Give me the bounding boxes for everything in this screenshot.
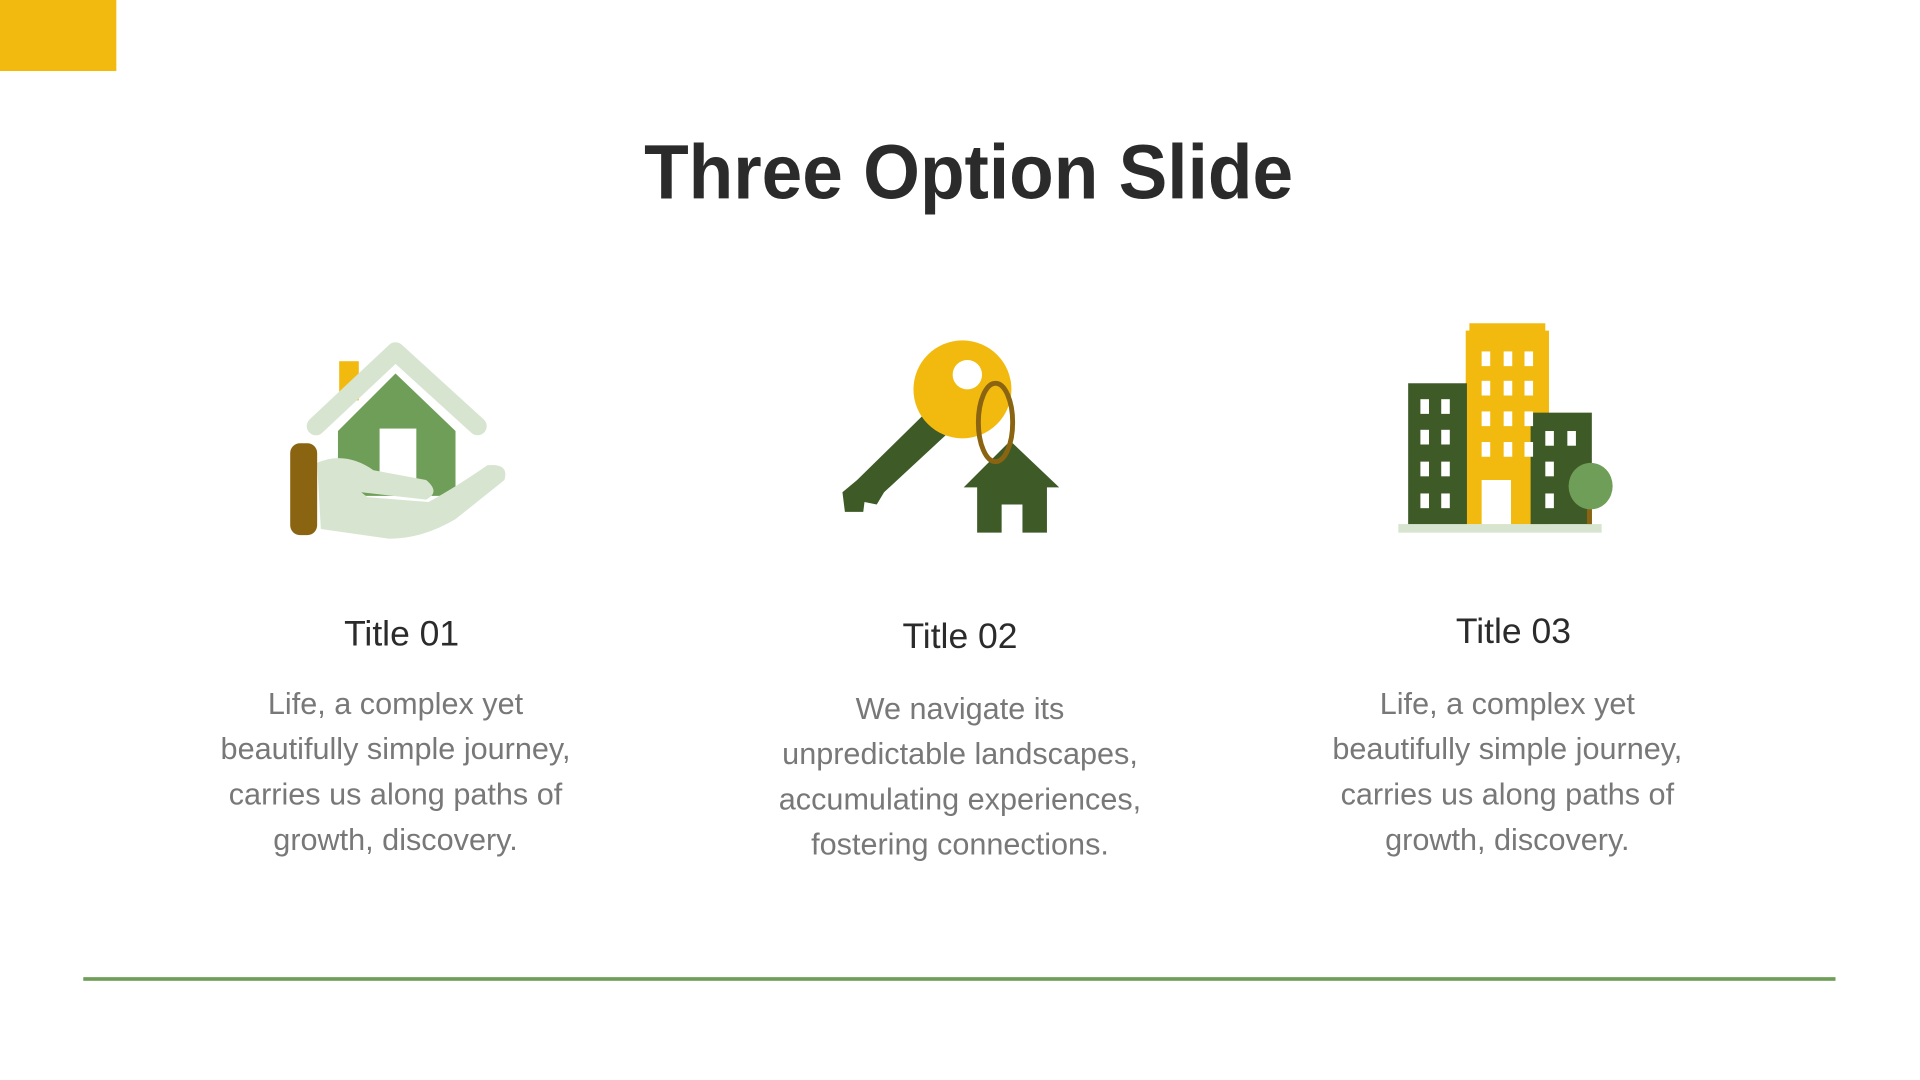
option 2 text: accumulating experiences, (779, 782, 1141, 816)
option 3 text (1332, 611, 1682, 857)
option 3 text: carries us along paths of (1341, 777, 1675, 811)
option 1 text: beautifully simple journey, (221, 732, 570, 766)
option 2 text: We navigate its (856, 692, 1064, 726)
icon: city buildings (1398, 323, 1613, 533)
option 1 text: Life, a complex yet (268, 687, 524, 721)
icon: house in hand (290, 351, 505, 539)
option 2 text: unpredictable landscapes, (782, 737, 1138, 771)
corner accent (0, 0, 116, 71)
option 2 text (779, 616, 1141, 862)
option 1 text: growth, discovery. (273, 823, 518, 857)
option 3 text: beautifully simple journey, (1332, 732, 1682, 766)
icon: keys with house tag (842, 340, 1059, 533)
option 3 text: Title 03 (1456, 611, 1571, 651)
option 2 text: fostering connections. (811, 828, 1109, 862)
option 2 text: Title 02 (902, 616, 1018, 656)
option 1 text (221, 613, 570, 857)
option 3 text: growth, discovery. (1385, 823, 1630, 857)
option 1 text: Title 01 (344, 613, 459, 653)
option 1 text: carries us along paths of (229, 777, 563, 811)
title: Three Option Slide (644, 129, 1293, 215)
option 3 text: Life, a complex yet (1380, 687, 1635, 721)
